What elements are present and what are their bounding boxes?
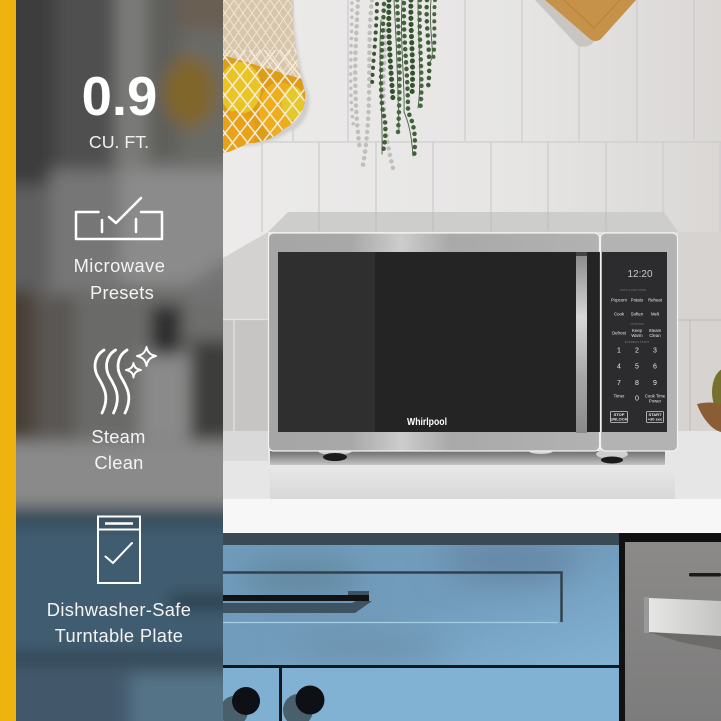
microwave control panel: UNLOCK <box>610 416 628 422</box>
microwave control panel: Keep <box>632 328 643 333</box>
net bag of lemons <box>223 0 310 153</box>
microwave control panel: +30 sec <box>648 416 663 422</box>
countertop <box>223 431 721 534</box>
microwave control panel: 12:20 <box>627 269 653 280</box>
microwave control panel: 0 <box>635 396 639 402</box>
microwave control panel <box>600 233 678 451</box>
microwave control panel: Power <box>649 398 662 404</box>
microwave control panel: 4 <box>617 364 621 370</box>
icon: steam clean <box>95 347 156 413</box>
label: microwave presets: Presets <box>90 282 154 303</box>
kitchen photo background <box>216 0 721 721</box>
label: dishwasher-safe turntable plate: Turntable Plate <box>55 625 183 646</box>
microwave door: Whirlpool <box>407 416 447 428</box>
hanging plant <box>372 0 435 157</box>
microwave control panel: Cook Time <box>645 394 666 398</box>
stat: capacity: 0.9 <box>82 66 157 127</box>
microwave control panel: AUTO FUNCTIONS <box>620 288 646 292</box>
microwave control panel: Steam <box>649 328 662 333</box>
label: steam clean: Steam <box>91 426 146 447</box>
microwave control panel: 7 <box>617 380 621 387</box>
microwave control panel: START <box>648 412 662 417</box>
label: steam clean <box>92 430 144 469</box>
microwave control panel: Reheat <box>648 298 663 302</box>
microwave control panel: OPTIONS <box>630 322 644 326</box>
label: steam clean: Clean <box>94 452 144 473</box>
microwave control panel: Cook <box>614 312 625 316</box>
microwave control panel: 5 <box>635 364 639 370</box>
wooden bowl and fruit <box>697 368 721 432</box>
microwave <box>268 212 678 464</box>
label: dishwasher-safe turntable plate: Dishwasher-Safe <box>47 599 191 620</box>
microwave control panel: Timer <box>614 394 625 398</box>
microwave control panel: 3 <box>653 348 657 354</box>
microwave control panel: 2 <box>635 348 639 354</box>
microwave control panel: 8 <box>635 380 639 387</box>
microwave control panel: STOP <box>614 412 625 417</box>
label: microwave presets: Microwave <box>74 255 165 276</box>
label: dishwasher-safe turntable plate <box>48 602 190 642</box>
dishwasher <box>625 542 721 721</box>
icon: dishwasher safe <box>98 516 140 583</box>
frosted side panel <box>16 0 223 721</box>
microwave control panel: 1 <box>617 348 621 354</box>
microwave top <box>268 212 678 232</box>
microwave control panel: Potato <box>631 298 644 302</box>
yellow side bar <box>0 0 16 721</box>
microwave control panel: Clean <box>649 333 661 338</box>
microwave control panel: Warm <box>631 333 643 338</box>
microwave door <box>268 233 600 451</box>
icon: microwave presets <box>76 198 162 239</box>
microwave control panel: EXPRESS START <box>625 340 649 344</box>
microwave control panel: Popcorn <box>611 298 628 302</box>
microwave control panel: Melt <box>651 312 660 316</box>
microwave feet <box>318 447 628 464</box>
stat: capacity <box>84 76 156 148</box>
plant shadow <box>351 0 393 170</box>
stat: capacity: CU. FT. <box>89 132 149 152</box>
label: microwave presets <box>75 258 164 299</box>
blurred backdrop <box>16 0 223 721</box>
microwave control panel: Defrost <box>612 330 627 336</box>
microwave control panel: Soften <box>631 312 644 316</box>
microwave control panel: 6 <box>653 364 657 370</box>
microwave control panel: 9 <box>653 380 657 387</box>
pot holder <box>535 0 636 47</box>
blue cabinets <box>220 533 721 721</box>
tile wall <box>223 0 721 440</box>
